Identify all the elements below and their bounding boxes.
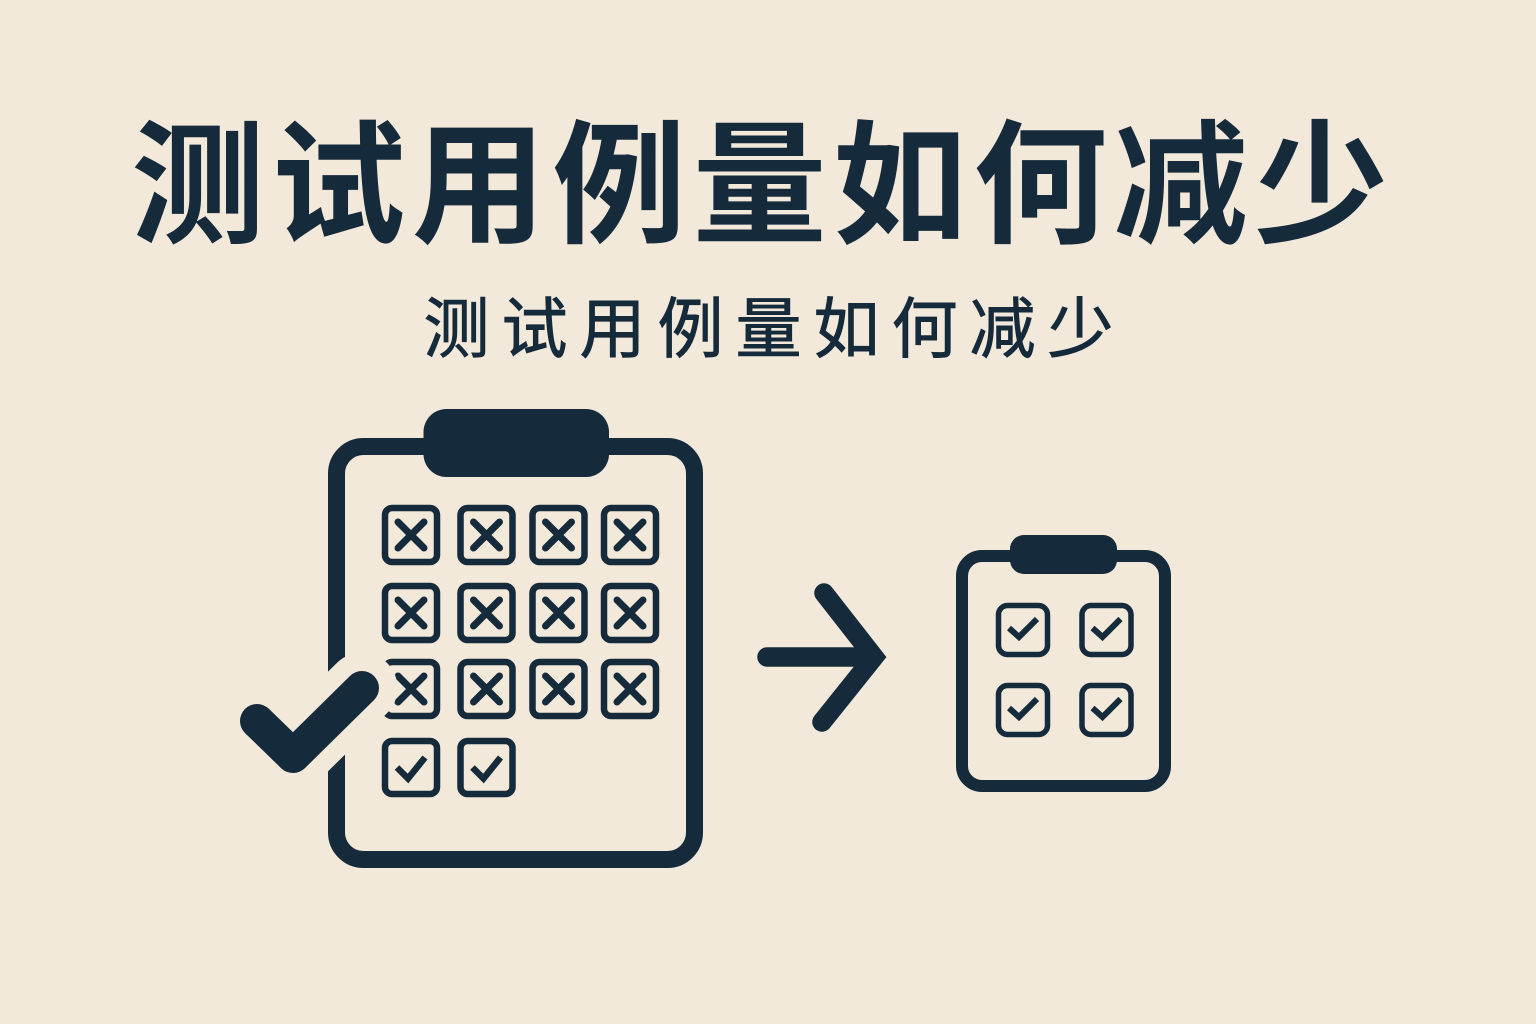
title: 测试用例量如何减少 [131,112,1395,262]
clipboard clip [424,409,609,477]
grid of crossed and checked boxes [385,508,656,794]
clipboard board [336,446,694,860]
icon: small clipboard with few test cases [962,535,1165,786]
four checked boxes [998,606,1131,734]
arrow [767,593,874,722]
large check mark with halo [257,688,362,756]
small clipboard clip [1010,535,1117,574]
small clipboard board [962,556,1165,786]
icon: large clipboard with many test cases [257,409,694,860]
subtitle: 测试用例量如何减少 [424,292,1126,366]
